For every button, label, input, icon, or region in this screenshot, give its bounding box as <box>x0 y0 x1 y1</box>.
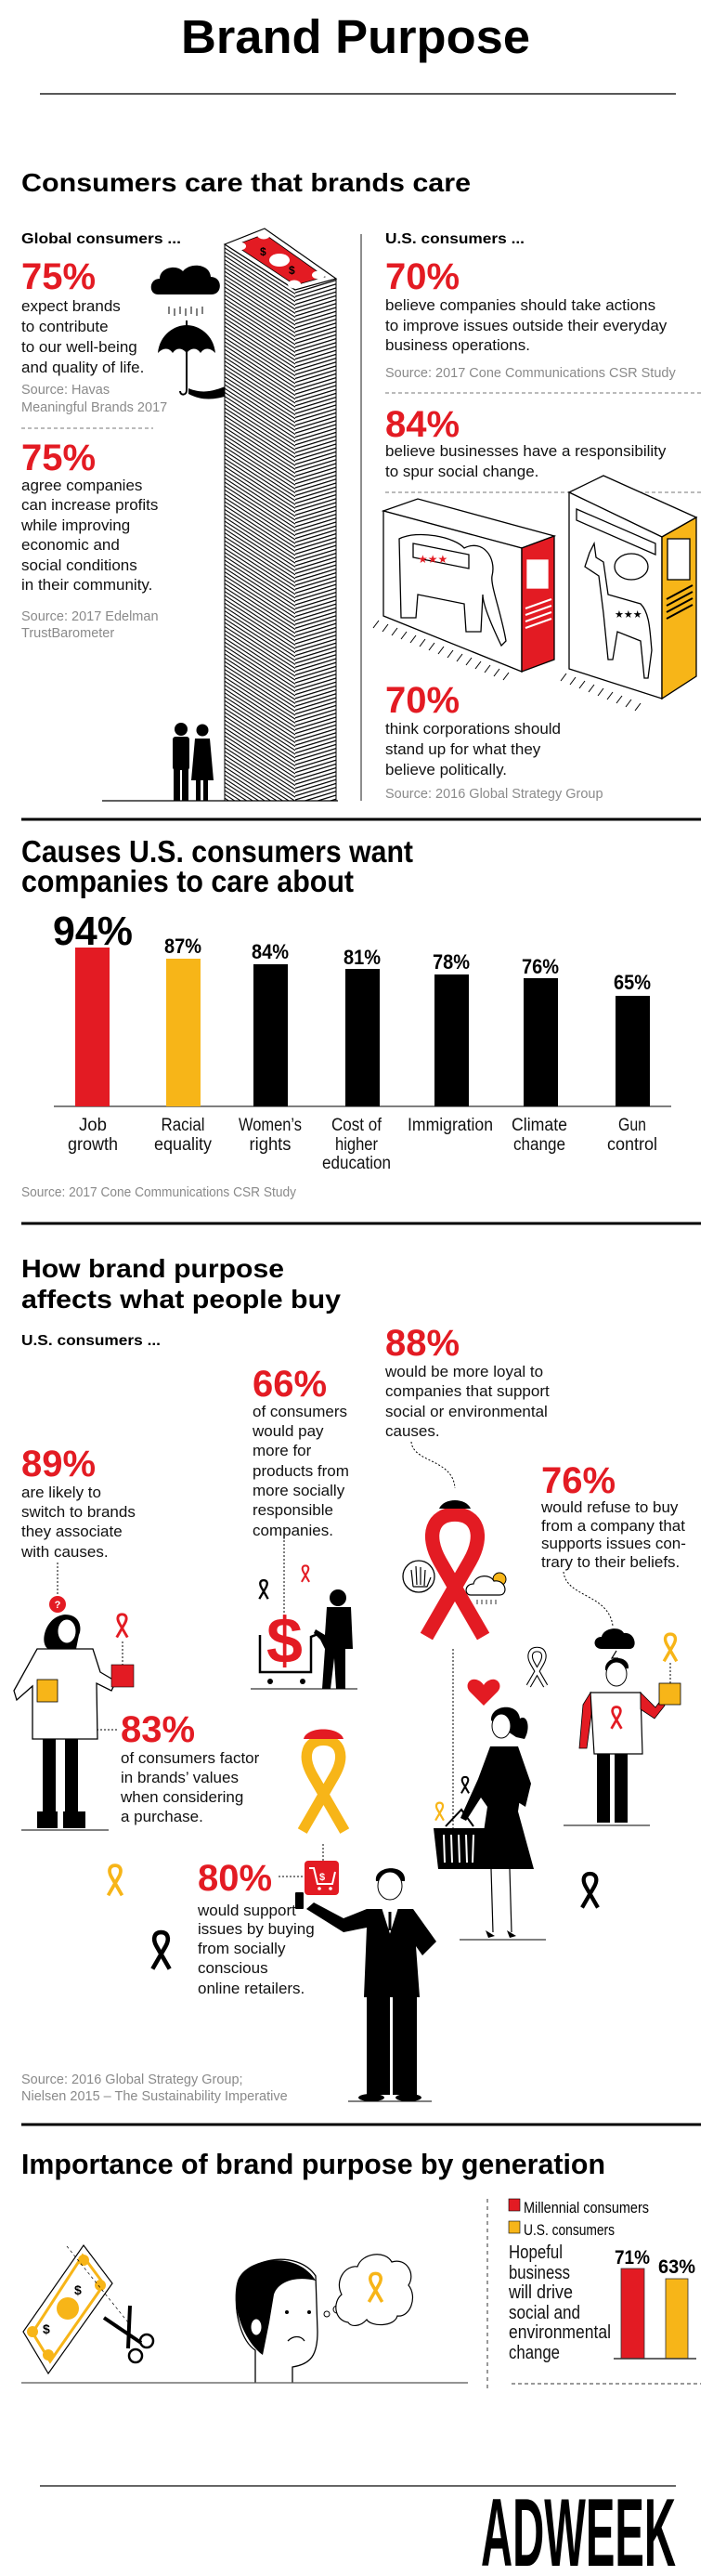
stat 70% actions: believe companies should take actions <box>385 296 655 314</box>
stat 66%: responsible <box>253 1501 333 1519</box>
panel: U.S. consumers <box>385 231 701 802</box>
stat 76%: from a company that <box>541 1517 685 1535</box>
icon: shopping cart: $ <box>319 1872 325 1883</box>
stat 80%: would support <box>197 1902 296 1919</box>
stat 75% wellbeing: Source: Havas <box>21 383 110 398</box>
stat 76%: 76% <box>541 1460 616 1501</box>
text: hopeful: change <box>509 2343 560 2363</box>
stat 66%: more for <box>253 1442 312 1459</box>
icon: money tower <box>225 229 336 801</box>
source: chart: Source: 2017 Cone Communications CSR Study <box>21 1185 297 1200</box>
figure: man with dollar cart: $ <box>266 1604 303 1677</box>
source: section 3: Source: 2016 Global Strategy Group; <box>21 2073 243 2087</box>
stat 88% <box>384 1323 550 1440</box>
icon: donkey box <box>561 476 696 711</box>
bar racial equality <box>164 935 201 1106</box>
stat 83%: 83% <box>121 1709 195 1750</box>
stat 70% politics: 70% <box>385 680 460 721</box>
category labels: Job <box>79 1116 107 1135</box>
stat 89%: with causes. <box>20 1543 109 1561</box>
stat 76%: would refuse to buy <box>540 1498 679 1516</box>
category labels: Cost of <box>331 1116 382 1135</box>
stat 80%: online retailers. <box>198 1980 305 1997</box>
stat 75% profits: social conditions <box>21 556 137 574</box>
stat 80%: 80% <box>198 1858 272 1899</box>
stat 76%: trary to their beliefs. <box>541 1553 680 1571</box>
stat 89%: 89% <box>21 1444 96 1484</box>
category labels: education <box>322 1154 391 1173</box>
stat 70% politics: believe politically. <box>385 761 507 778</box>
icon: big red ribbon <box>426 1500 484 1637</box>
stat 70% actions: 70% <box>385 256 460 297</box>
figure: boy with cloud <box>564 1658 681 1825</box>
stat 83%: in brands’ values <box>121 1769 239 1786</box>
icon: yellow ribbon <box>303 1730 344 1831</box>
bar chart: causes <box>53 909 671 1173</box>
figure: woman with basket <box>434 1707 546 1940</box>
category labels: control <box>607 1135 657 1155</box>
bar job growth: 94% <box>53 909 133 954</box>
bar climate <box>522 955 559 1106</box>
stat 84%: believe businesses have a responsibility <box>385 442 667 460</box>
icon: storm cloud <box>594 1628 635 1666</box>
stat 66%: of consumers <box>253 1403 347 1420</box>
bar gun control <box>614 971 651 1106</box>
panel: global consumers <box>20 231 181 641</box>
heading: importance by generation: Importance of brand purpose by generation <box>21 2148 605 2180</box>
stat 66%: 66% <box>253 1364 327 1405</box>
stat 75% wellbeing: Meaningful Brands 2017 <box>21 400 167 415</box>
heading: causes: Causes U.S. consumers want <box>21 834 413 869</box>
icon: two people <box>173 723 214 801</box>
icon: elephant box <box>373 499 554 680</box>
stat 75% wellbeing: 75% <box>21 256 96 297</box>
stat 88%: would be more loyal to <box>384 1363 543 1380</box>
text: hopeful: will drive <box>508 2282 573 2303</box>
legend: U.S. consumers <box>524 2221 615 2239</box>
stat 80%: from socially <box>198 1940 286 1957</box>
heading: causes: companies to care about <box>21 864 354 898</box>
stat 70% actions: business operations. <box>385 336 530 354</box>
icon: money being cut: $ <box>43 2321 50 2336</box>
heading: how brand purpose: affects what people buy <box>21 1285 341 1314</box>
figure: thinking head <box>236 2255 412 2383</box>
icon: money being cut <box>23 2245 153 2373</box>
category labels: Immigration <box>408 1116 493 1135</box>
stat 83%: when considering <box>120 1788 243 1806</box>
stat 70% politics: Source: 2016 Global Strategy Group <box>385 787 603 802</box>
icon: money tower: $ <box>289 264 295 277</box>
text: hopeful: social and <box>509 2303 580 2323</box>
icon: donkey box: ★★★ <box>615 609 642 621</box>
dotted connectors <box>48 1442 670 1876</box>
stat 89%: switch to brands <box>21 1503 136 1521</box>
heading: causes <box>21 834 413 898</box>
stat 76% <box>540 1460 686 1571</box>
stat 75% profits: TrustBarometer <box>21 626 114 641</box>
divider <box>360 234 362 801</box>
category labels: rights <box>249 1135 292 1155</box>
stat 75% profits: in their community. <box>21 576 152 594</box>
stat 75% profits: while improving <box>20 517 130 534</box>
bar immigration: 78% <box>433 950 470 974</box>
stat 89% <box>20 1444 136 1561</box>
bar chart: generation: 71% <box>615 2247 650 2269</box>
small ribbons <box>109 1565 677 1968</box>
category labels: change <box>513 1135 565 1155</box>
stat 89%: are likely to <box>21 1484 101 1501</box>
stat 83% <box>120 1709 260 1825</box>
category labels: growth <box>68 1135 118 1155</box>
subheading global: Global consumers ... <box>21 231 181 247</box>
bar higher education: 81% <box>344 946 381 969</box>
stat 75% profits: can increase profits <box>21 496 158 514</box>
stat 88%: causes. <box>385 1422 440 1440</box>
text: hopeful: Hopeful <box>509 2243 563 2263</box>
stat 70% actions: Source: 2017 Cone Communications CSR Study <box>385 366 676 381</box>
stat 80%: issues by buying <box>198 1920 315 1938</box>
stat 70% politics <box>385 680 603 802</box>
stat 76%: supports issues con- <box>541 1535 686 1552</box>
stat 70% politics: stand up for what they <box>385 740 541 758</box>
stat 84%: to spur social change. <box>385 463 538 480</box>
stat 75% wellbeing <box>21 256 167 415</box>
icon: hand in circle <box>403 1561 434 1592</box>
stat 89%: they associate <box>21 1523 123 1540</box>
stat 70% politics: think corporations should <box>385 720 561 738</box>
stat 83%: a purchase. <box>121 1808 203 1825</box>
icon: cloud with sun <box>466 1573 506 1604</box>
subheading US consumers: U.S. consumers ... <box>21 1333 161 1349</box>
stat 75% profits: economic and <box>21 536 120 554</box>
category labels: equality <box>154 1135 212 1155</box>
bar chart: generation <box>614 2247 696 2359</box>
source: section 3 <box>21 2073 288 2104</box>
stat 75% wellbeing: to contribute <box>21 318 109 335</box>
stat 80% <box>197 1858 315 1997</box>
source: section 3: Nielsen 2015 – The Sustainability Imperative <box>21 2089 288 2104</box>
stat 75% profits: 75% <box>21 438 96 478</box>
title: Brand Purpose <box>181 10 530 63</box>
text: hopeful <box>508 2243 611 2363</box>
icon: money tower: $ <box>260 245 266 258</box>
legend <box>509 2199 649 2239</box>
stat 75% wellbeing: expect brands <box>21 297 121 315</box>
category labels: Climate <box>512 1116 567 1135</box>
stat 75% profits: agree companies <box>21 477 142 494</box>
stat 66%: products from <box>253 1462 349 1480</box>
text: hopeful: environmental <box>509 2322 611 2343</box>
icon: heart <box>468 1680 499 1706</box>
stat 84%: 84% <box>385 404 460 445</box>
text: hopeful: business <box>509 2263 570 2283</box>
stat 80%: conscious <box>198 1959 268 1977</box>
subheading US: U.S. consumers ... <box>385 231 525 247</box>
icon: cloud and umbrella <box>151 266 227 399</box>
category labels <box>68 1116 657 1173</box>
stat 75% wellbeing: and quality of life. <box>21 359 144 376</box>
stat 70% actions <box>385 256 676 381</box>
bar gun control: 65% <box>614 971 651 994</box>
figure: woman in coat <box>14 1596 134 1830</box>
category labels: Women’s <box>239 1116 302 1135</box>
stat 83%: of consumers factor <box>121 1749 260 1767</box>
stat 66%: companies. <box>253 1522 333 1539</box>
stat 66%: more socially <box>253 1482 345 1499</box>
stat 75% profits <box>20 438 159 641</box>
category labels: Gun <box>618 1116 646 1135</box>
heading: consumers care: Consumers care that brands care <box>21 168 471 197</box>
heading: how brand purpose <box>21 1254 341 1314</box>
bar women's rights <box>252 940 289 1106</box>
stat 88%: social or environmental <box>385 1403 548 1420</box>
bar women's rights: 84% <box>252 940 289 963</box>
legend: Millennial consumers <box>524 2199 649 2216</box>
heading: how brand purpose: How brand purpose <box>21 1254 284 1283</box>
figure: woman in coat: ? <box>55 1600 61 1611</box>
stat 84% <box>385 404 667 480</box>
icon: elephant box: ★★★ <box>418 553 447 566</box>
stat 88%: companies that support <box>385 1382 550 1400</box>
icon: money being cut: $ <box>74 2282 82 2297</box>
stat 75% wellbeing: to our well-being <box>21 338 137 356</box>
bar racial equality: 87% <box>164 935 201 958</box>
stat 75% profits: Source: 2017 Edelman <box>21 609 159 624</box>
bar higher education <box>344 946 381 1106</box>
stat 66% <box>252 1364 349 1539</box>
category labels: Racial <box>162 1116 204 1135</box>
bar job growth <box>53 909 133 1106</box>
bar immigration <box>433 950 470 1106</box>
figure: man with dollar cart <box>251 1589 357 1689</box>
bar chart: generation: 63% <box>658 2256 695 2278</box>
stat 70% actions: to improve issues outside their everyday <box>385 317 668 334</box>
icon: shopping cart <box>305 1861 339 1895</box>
stat 66%: would pay <box>252 1422 324 1440</box>
category labels: higher <box>335 1135 379 1155</box>
stat 88%: 88% <box>385 1323 460 1364</box>
bar climate: 76% <box>522 955 559 978</box>
figure: businessman <box>295 1868 436 2101</box>
